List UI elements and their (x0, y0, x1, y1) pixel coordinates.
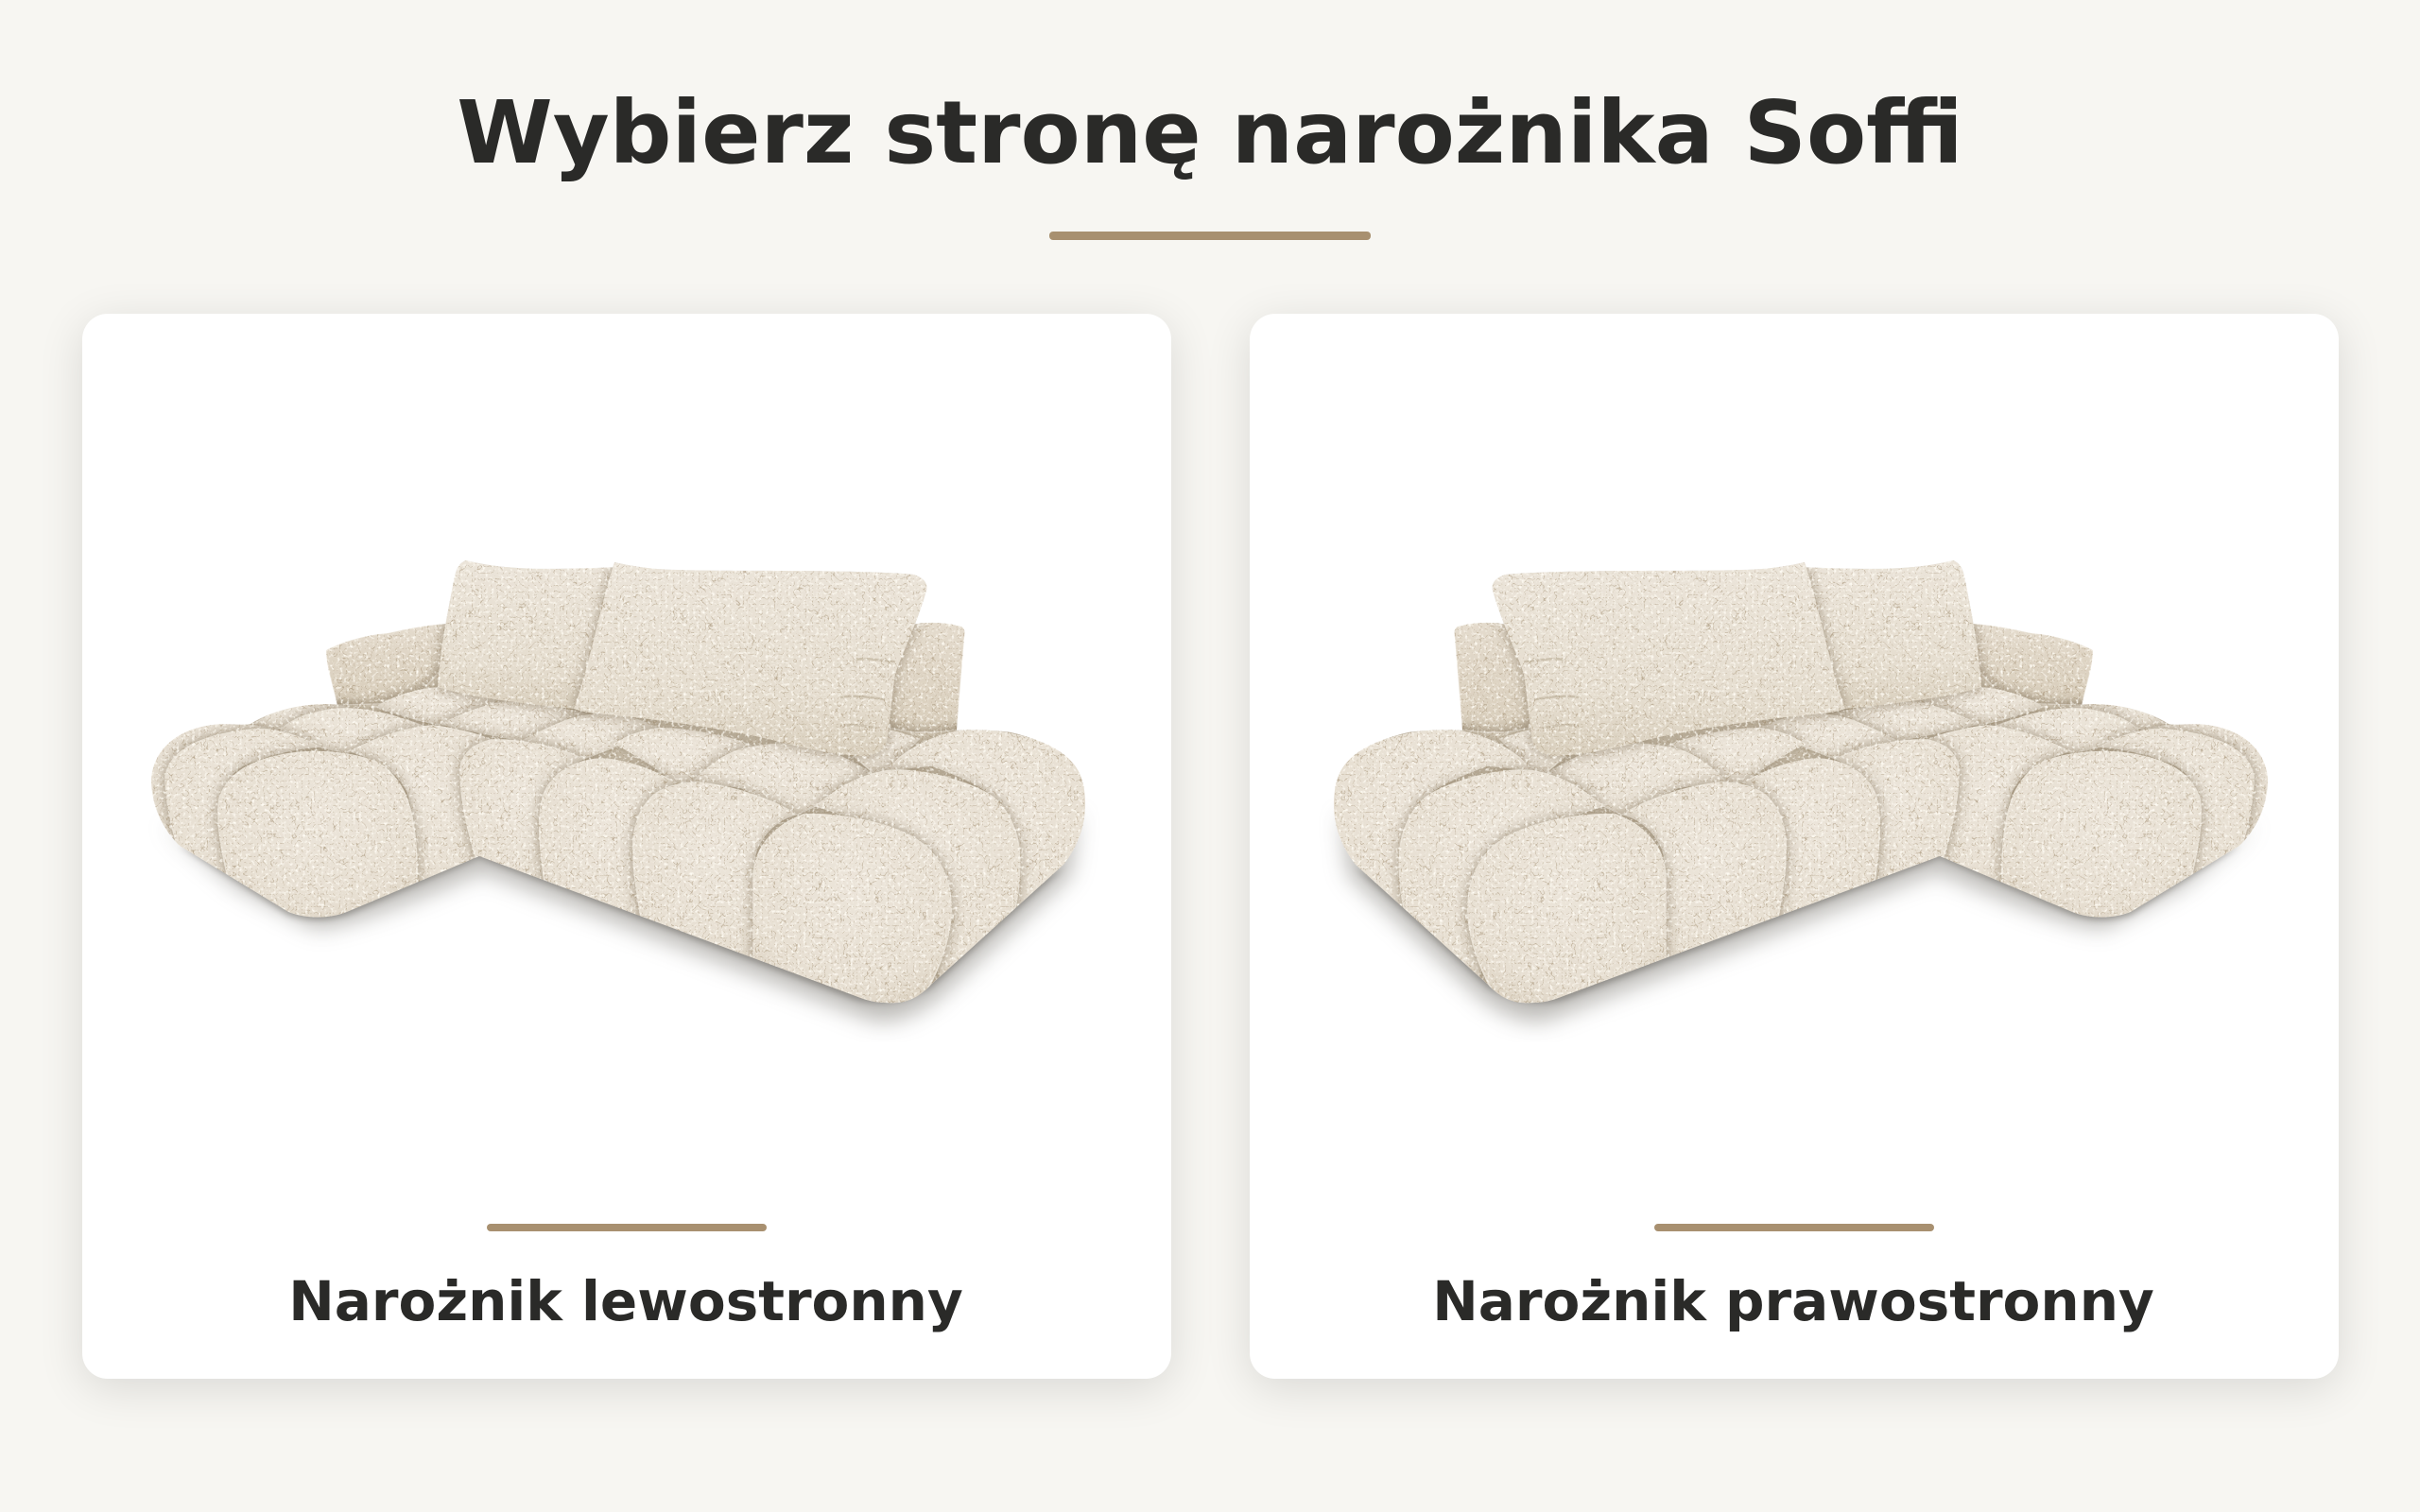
title accent bar (1049, 232, 1371, 240)
main seat tufts (460, 730, 1086, 1009)
right panel label: Narożnik prawostronny (1432, 1269, 2154, 1333)
right armrest (889, 622, 964, 731)
cushion wrinkles (841, 659, 893, 728)
left panel accent bar (487, 1224, 767, 1231)
cushion wrinkles (1526, 659, 1578, 728)
right armrest (1970, 624, 2093, 709)
front back cushion (574, 562, 926, 756)
front back cushion (1493, 562, 1845, 756)
sofa floor shadow (1341, 813, 2256, 1021)
left panel label: Narożnik lewostronny (288, 1269, 963, 1333)
chaise longue tufts (1927, 704, 2268, 925)
rear seat tufts (1500, 688, 2043, 815)
rear back cushion (1795, 560, 1981, 711)
sofa body (151, 560, 1086, 1009)
left armrest (1454, 622, 1530, 731)
main seat tufts (1333, 730, 1959, 1009)
rear back cushion (438, 560, 624, 711)
seat base (229, 663, 1036, 986)
rear seat tufts (376, 688, 919, 815)
sofa body (1333, 560, 2268, 1009)
right panel accent bar (1654, 1224, 1934, 1231)
seat base (1383, 663, 2191, 986)
panel: right corner sofa (1250, 314, 2339, 1379)
title: Wybierz stronę narożnika Soffi (457, 82, 1963, 183)
illustration: right-hand corner sofa (1331, 560, 2268, 1033)
sofa floor shadow (163, 813, 1078, 1021)
left armrest (326, 624, 449, 709)
chaise longue tufts (151, 704, 492, 925)
illustration: left-hand corner sofa (151, 560, 1087, 1033)
panel: left corner sofa (82, 314, 1171, 1379)
